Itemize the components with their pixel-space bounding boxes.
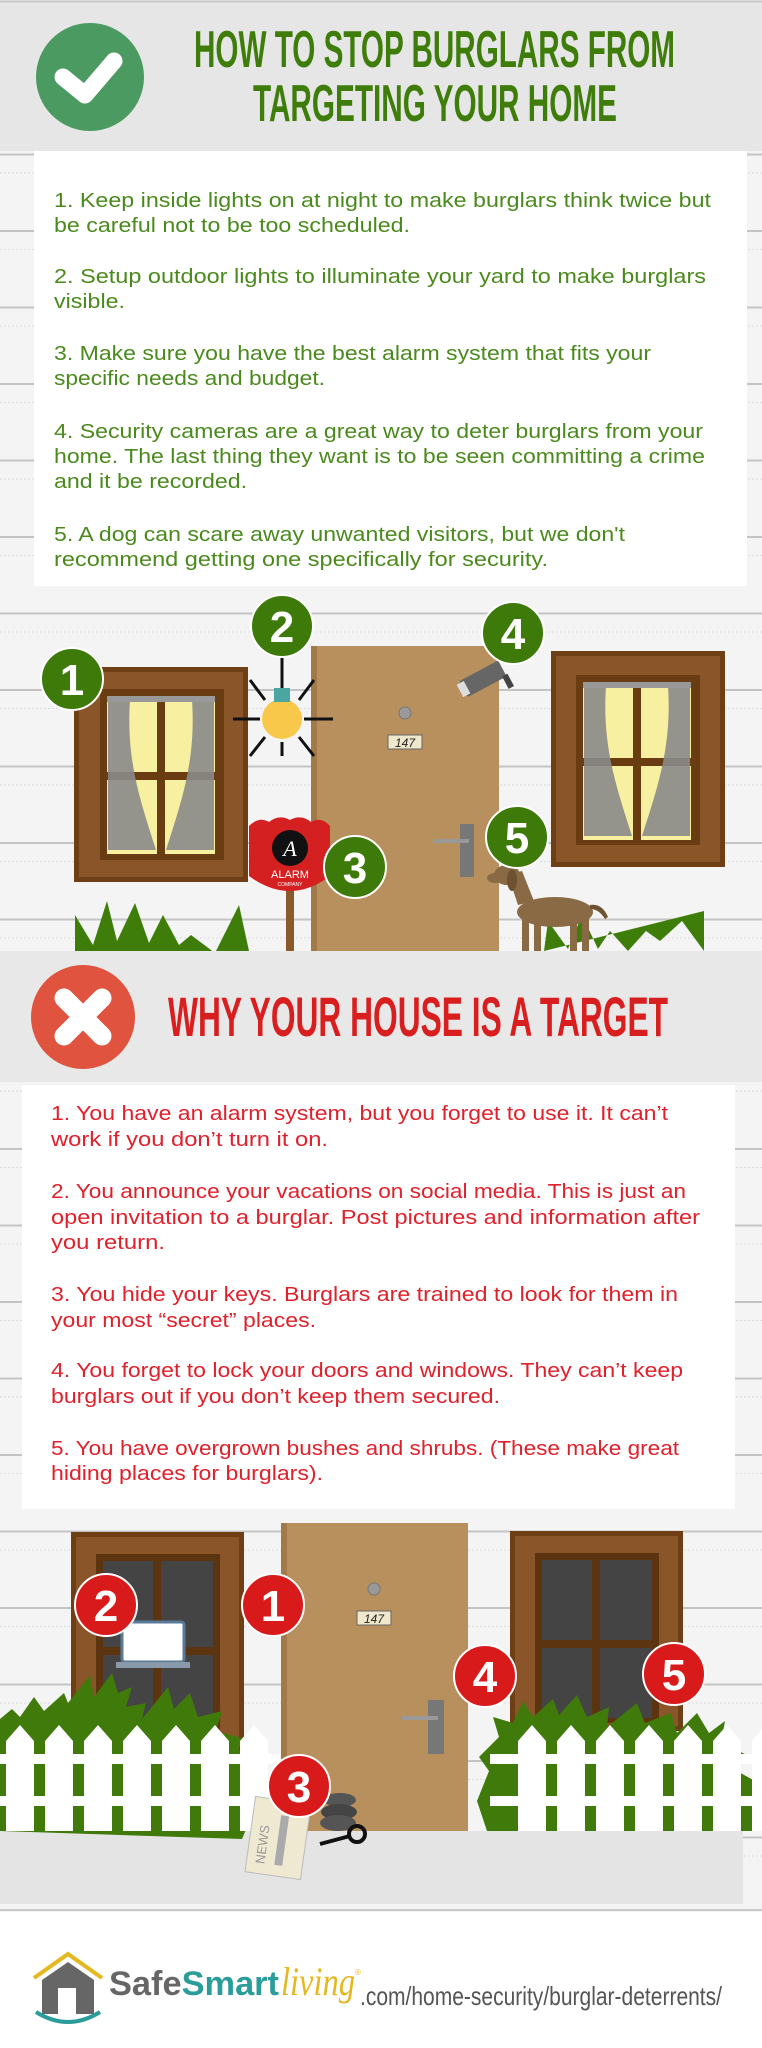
grass xyxy=(75,901,704,953)
panel: prevention tips: 1. Keep inside lights on at night to make burglars think twice but xyxy=(54,190,712,212)
panel: prevention tips: and it be recorded. xyxy=(54,471,247,493)
illustration: vulnerable house front xyxy=(0,1523,762,1911)
door: 147 xyxy=(395,736,416,750)
marker 5 xyxy=(643,1643,705,1705)
marker 3: 3 xyxy=(287,1763,311,1812)
right window with lit curtains xyxy=(551,651,725,867)
panel: reasons: open invitation to a burglar. Post pictures and information after xyxy=(51,1207,700,1229)
marker 1: 1 xyxy=(261,1582,285,1631)
marker 2: 2 xyxy=(270,603,294,652)
alarm sign: COMPANY xyxy=(278,882,303,888)
marker 3: 3 xyxy=(343,844,367,893)
footer logo and url: living xyxy=(281,1959,355,2004)
marker 4: 4 xyxy=(501,610,526,659)
number markers: red xyxy=(75,1574,705,1817)
ground xyxy=(0,1831,743,1904)
icon: dog xyxy=(487,865,608,951)
header: stop burglars xyxy=(0,3,762,151)
marker 3 xyxy=(324,836,386,898)
door: 147 xyxy=(364,1612,385,1626)
number markers: green xyxy=(41,595,548,898)
door xyxy=(281,1523,468,1831)
door xyxy=(311,646,499,951)
panel: prevention tips: visible. xyxy=(54,291,125,313)
alarm sign: ALARM xyxy=(271,869,309,881)
fence xyxy=(0,1725,762,1831)
marker 1: 1 xyxy=(60,656,84,705)
footer logo and url xyxy=(34,1954,723,2022)
panel: prevention tips xyxy=(34,151,747,586)
marker 4: 4 xyxy=(473,1653,498,1702)
panel: prevention tips: 2. Setup outdoor lights to illuminate your yard to make burglars xyxy=(54,266,706,288)
panel: reasons: your most “secret” places. xyxy=(51,1310,316,1332)
bushes xyxy=(0,1673,762,1839)
right window dark xyxy=(510,1531,683,1731)
panel: prevention tips: specific needs and budget. xyxy=(54,368,325,390)
newspaper, rocks and key xyxy=(245,1793,365,1880)
marker 2 xyxy=(251,595,313,657)
icon: check circle xyxy=(36,23,144,131)
marker 4 xyxy=(454,1645,516,1707)
footer logo and url: SafeSmart xyxy=(109,1965,279,2003)
panel: prevention tips: 4. Security cameras are a great way to deter burglars from your xyxy=(54,421,703,443)
left window with lit curtains xyxy=(74,667,248,882)
marker 3 xyxy=(268,1755,330,1817)
panel: reasons: you return. xyxy=(51,1232,165,1254)
panel: reasons: burglars out if you don’t keep them secured. xyxy=(51,1386,500,1408)
alarm sign: A xyxy=(281,836,297,861)
marker 1 xyxy=(41,648,103,710)
marker 1 xyxy=(242,1574,304,1636)
panel: reasons: work if you don’t turn it on. xyxy=(50,1129,328,1151)
panel: reasons: hiding places for burglars). xyxy=(51,1463,323,1485)
marker 5: 5 xyxy=(662,1651,686,1700)
panel: prevention tips: home. The last thing they want is to be seen committing a crime xyxy=(54,446,705,468)
header: why target xyxy=(0,951,762,1082)
panel: prevention tips: recommend getting one specifically for security. xyxy=(54,549,548,571)
icon: light bulb xyxy=(233,658,333,756)
panel: prevention tips: 5. A dog can scare away unwanted visitors, but we don't xyxy=(54,524,625,546)
illustration: protected house front xyxy=(74,646,725,953)
marker 5: 5 xyxy=(505,814,529,863)
title xyxy=(194,21,675,133)
panel: reasons: 1. You have an alarm system, but you forget to use it. It can’t xyxy=(51,1103,669,1125)
marker 4 xyxy=(482,602,544,664)
marker 5 xyxy=(486,806,548,868)
panel: reasons: 2. You announce your vacations on social media. This is just an xyxy=(51,1181,686,1203)
panel: reasons: 5. You have overgrown bushes and shrubs. (These make great xyxy=(51,1438,679,1460)
panel: prevention tips: be careful not to be too scheduled. xyxy=(54,215,410,237)
footer logo and url: ® xyxy=(355,1968,361,1977)
newspaper, rocks and key: NEWS xyxy=(252,1824,273,1865)
icon: security camera xyxy=(456,660,514,710)
panel: reasons: 4. You forget to lock your doors and windows. They can’t keep xyxy=(51,1360,683,1382)
panel: reasons xyxy=(22,1085,735,1509)
marker 2: 2 xyxy=(94,1582,118,1631)
icon: house logo xyxy=(34,1954,102,2022)
panel: reasons: 3. You hide your keys. Burglars are trained to look for them in xyxy=(51,1284,678,1306)
alarm sign xyxy=(249,817,330,951)
icon: x circle xyxy=(31,965,135,1069)
panel: prevention tips: 3. Make sure you have the best alarm system that fits your xyxy=(54,343,651,365)
marker 2 xyxy=(75,1574,137,1636)
left window dark xyxy=(71,1532,244,1772)
